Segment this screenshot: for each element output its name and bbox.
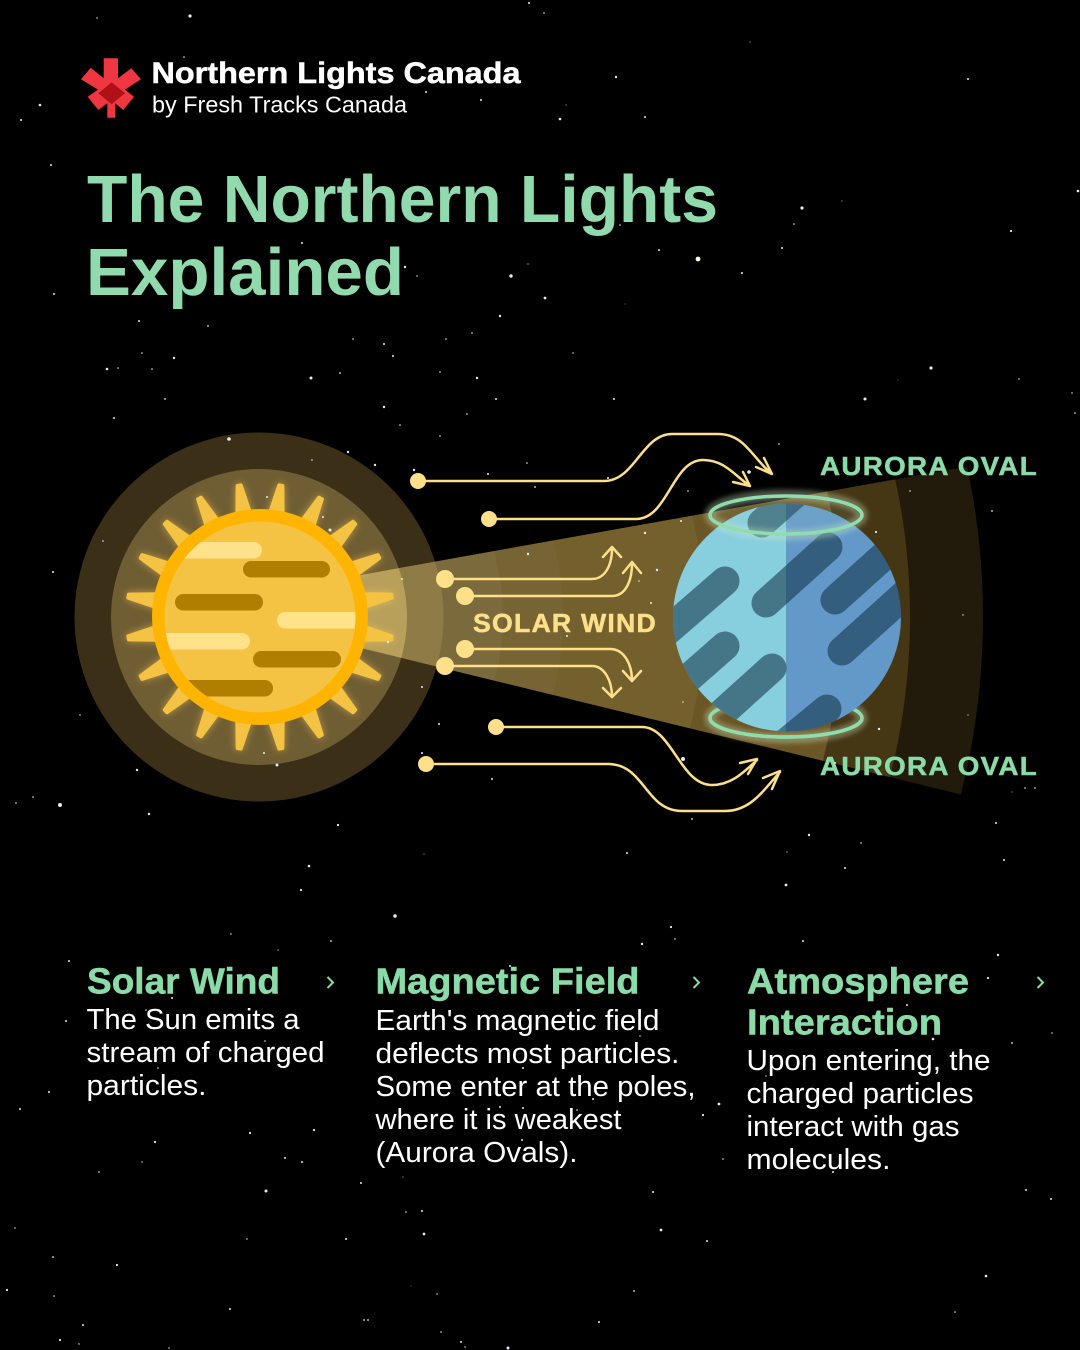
title: Explained [86,235,404,310]
sun disc [158,515,362,719]
label: aurora oval north: AURORA OVAL [820,451,1038,481]
aurora oval: south (front arc) [708,718,864,739]
sun rays [127,484,393,750]
body text: particles. [86,1070,206,1102]
label: aurora oval south: AURORA OVAL [820,751,1038,781]
aurora oval: south (back) [710,698,862,738]
brand tagline: by Fresh Tracks Canada [152,92,407,118]
heading: Solar Wind [87,960,280,1002]
body text [86,1004,324,1102]
title: The Northern Lights [87,162,718,237]
body text [746,1045,990,1176]
sun halo: outer [74,432,444,802]
panel: atmosphere interaction [746,960,990,1176]
logo [81,58,141,118]
particle arrows [410,434,780,811]
heading: Magnetic Field [376,960,640,1002]
chevron 3 [1038,977,1043,988]
body text: where it is weakest [374,1104,622,1136]
arrow 1: deflected top outer [410,434,772,489]
arrow 6: solar wind down [436,657,621,697]
arrow 2: deflected top inner [481,460,750,527]
sun ray glow [127,484,393,750]
body text: Some enter at the poles, [376,1071,696,1103]
brand name: Northern Lights Canada [152,57,521,90]
arrow 7: deflected bottom inner [488,719,757,785]
body text: charged particles [746,1078,974,1110]
body text: stream of charged [86,1037,324,1069]
body text: interact with gas [746,1111,960,1143]
chevron 2 [694,977,699,988]
sun [127,484,393,750]
body text: Earth's magnetic field [376,1005,660,1037]
body text: The Sun emits a [86,1004,300,1036]
body text: (Aurora Ovals). [376,1137,578,1169]
arrow 3: solar wind up [436,547,621,588]
arrow 8: deflected bottom outer [418,756,780,811]
heading [747,960,969,1042]
earth [673,504,901,732]
aurora oval: north [710,495,862,535]
body text: molecules. [746,1144,890,1176]
label: solar wind: SOLAR WIND [473,608,657,638]
panel: solar wind [86,960,324,1102]
sun stripes [166,542,356,696]
body text [374,1005,696,1169]
panel: magnetic field [374,960,696,1169]
earth stripes [673,504,901,732]
arrow 4: solar wind up [456,562,641,605]
heading: Interaction [747,1002,942,1042]
arrow 5: solar wind down [456,640,641,681]
sun halo: inner [111,469,407,765]
body text: Upon entering, the [746,1045,990,1077]
title [86,162,718,310]
solar wind beam [360,466,983,794]
heading: Atmosphere [747,960,969,1002]
body text: deflects most particles. [376,1038,680,1070]
chevron 1 [328,977,333,988]
